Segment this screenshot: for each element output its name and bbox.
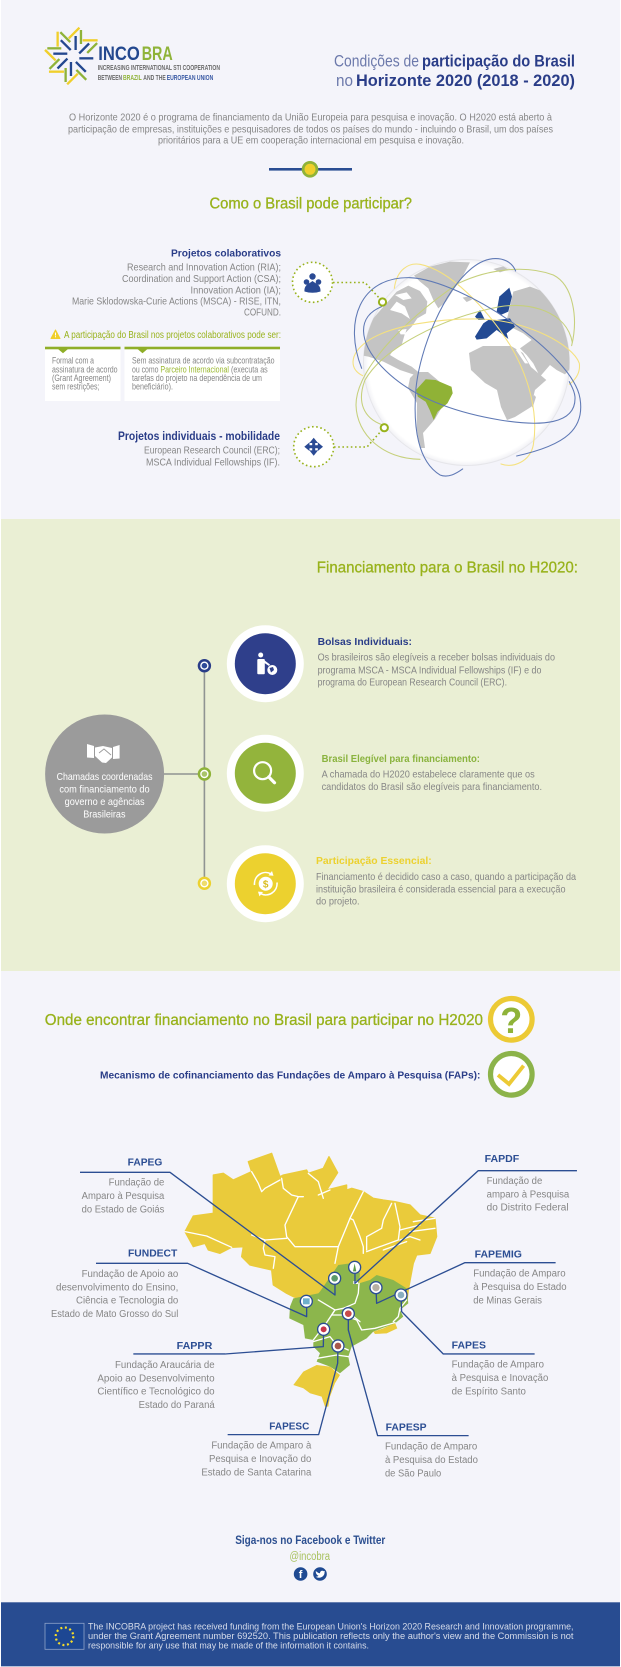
orbits — [353, 259, 581, 476]
panel: formal — [45, 347, 120, 401]
label: FAPEG: Fundação de — [109, 1178, 165, 1189]
text block: Bolsas Individuais: Os brasileiros são elegíveis a receber bolsas individuais do — [318, 652, 555, 664]
funding disclaimer: under the Grant Agreement number 692520. This publication reflects only the author's view and the Commission is not — [88, 1631, 574, 1642]
logo wordmark: INCREASING INTERNATIONAL STI COOPERATION — [98, 63, 220, 72]
intro paragraph — [68, 112, 553, 147]
funding disclaimer: The INCOBRA project has received funding from the European Union's Horizon 2020 Research and Innovation programme, — [88, 1621, 574, 1632]
label: FAPPR: Apoio ao Desenvolvimento — [97, 1373, 215, 1384]
title: no — [336, 72, 353, 90]
text block: Participação Essencial: Participação Essencial: — [316, 855, 432, 867]
globe with orbits — [353, 259, 581, 476]
label: FAPEG: Amparo à Pesquisa — [82, 1191, 165, 1202]
logo wordmark: EUROPEAN UNION — [167, 73, 213, 82]
icon: warning triangle — [51, 330, 60, 338]
icon circle: money exchange — [227, 845, 304, 922]
label: FAPEMIG — [473, 1250, 567, 1306]
title: Horizonte 2020 (2018 - 2020) — [356, 72, 575, 90]
subheading: mecanismo FAPs: Mecanismo de cofinanciamento das Fundações de Amparo à Pesquisa (FAPs): — [100, 1069, 480, 1081]
icon circle: magnifier — [227, 735, 304, 812]
connector lines — [164, 666, 204, 883]
text block: Brasil Elegível: Brasil Elegível para financiamento: — [322, 753, 480, 765]
text block: Brasil Elegível: candidatos do Brasil são elegíveis para financiamento. — [322, 781, 542, 793]
gray circle: chamadas coordenadas: Brasileiras — [83, 808, 126, 820]
logo wordmark — [98, 43, 220, 82]
divider ornament — [269, 161, 352, 178]
label: FAPEMIG: Fundação de Amparo — [473, 1269, 566, 1280]
panel: subcontratação: ou como — [132, 364, 158, 374]
text block: Participação Essencial: do projeto. — [316, 896, 360, 908]
heading: Onde encontrar financiamento: Onde encontrar financiamento no Brasil para participar no H2020 — [45, 1012, 483, 1029]
logo wordmark: BRA — [142, 43, 173, 65]
text block: Bolsas Individuais: programa do European Research Council (ERC). — [318, 677, 507, 689]
label: FAPEMIG: FAPEMIG — [475, 1250, 522, 1261]
footer panel — [1, 1602, 620, 1666]
intro paragraph: prioritários para a UE em cooperação internacional em pesquisa e inovação. — [158, 135, 464, 147]
label: FUNDECT — [51, 1248, 179, 1320]
icon: question mark: ? — [500, 1000, 522, 1041]
gray circle: chamadas coordenadas — [45, 714, 164, 834]
label: FAPESC: Estado de Santa Catarina — [201, 1467, 312, 1478]
logo wordmark: AND THE — [143, 73, 166, 82]
label: FAPES — [452, 1340, 549, 1397]
social block: Siga-nos no Facebook e Twitter — [235, 1535, 386, 1547]
label: FAPPR: Estado do Paraná — [139, 1400, 215, 1411]
icon: question mark — [490, 998, 532, 1041]
text block: Participação Essencial: Financiamento é decidido caso a caso, quando a participação da — [316, 871, 576, 883]
intro paragraph: participação de empresas, instituições e pesquisadores de todos os países do mundo - incluindo o Brasil, um dos países — [68, 123, 553, 135]
funding disclaimer — [88, 1621, 574, 1652]
pins — [300, 1261, 407, 1352]
callout: participação do Brasil: A participação do Brasil nos projetos colaborativos pode ser: — [64, 330, 281, 341]
map: state borders — [185, 1172, 435, 1358]
label: FUNDECT: FUNDECT — [128, 1248, 177, 1259]
icon circle: person with globe — [227, 625, 304, 702]
text block: Projetos colaborativos: Projetos colaborativos — [171, 248, 281, 260]
social block: @incobra — [290, 1551, 330, 1563]
icon: collaborative people — [292, 262, 386, 306]
icon: check mark — [490, 1054, 532, 1095]
icon: mobility arrows — [294, 424, 388, 467]
Brazil — [416, 379, 453, 420]
gray circle: chamadas coordenadas: com financiamento do — [59, 784, 150, 796]
intro paragraph: O Horizonte 2020 é o programa de financiamento da União Europeia para pesquisa e inovação. O H2020 está aberto à — [69, 112, 552, 124]
gray circle: chamadas coordenadas: governo e agências — [65, 796, 145, 808]
map: green states — [289, 1263, 408, 1373]
label: FAPPR: Fundação Araucária de — [115, 1360, 215, 1371]
text block: Projetos colaborativos: COFUND. — [244, 307, 281, 319]
icon: star pinwheel — [45, 28, 98, 84]
panel: subcontratação: Sem assinatura de acordo via subcontratação — [132, 355, 274, 365]
timeline node: green — [198, 767, 211, 781]
text block: Participação Essencial — [316, 855, 576, 908]
logo: INCOBRA — [45, 28, 220, 84]
text block: Projetos individuais — [118, 431, 280, 469]
label: FAPESP: Fundação de Amparo — [385, 1442, 478, 1453]
panel: formal: assinatura de acordo — [52, 364, 118, 374]
label: FAPPR — [97, 1341, 215, 1411]
text block: Projetos colaborativos — [72, 248, 281, 319]
text block: Participação Essencial: instituição brasileira é considerada essencial para a execução — [316, 883, 566, 895]
title: Condições de — [334, 53, 419, 71]
label: FAPDF — [485, 1154, 570, 1214]
label: FUNDECT: Estado de Mato Grosso do Sul — [51, 1309, 178, 1320]
panel: subcontratação: tarefas do projeto na dependência de um — [132, 373, 262, 383]
label: FAPESP: FAPESP — [386, 1422, 427, 1433]
text block: Bolsas Individuais: Bolsas Individuais: — [318, 636, 412, 648]
label: FAPDF: Fundação de — [487, 1176, 543, 1187]
label: FAPESP: à Pesquisa do Estado — [385, 1455, 478, 1466]
title — [334, 53, 575, 90]
logo wordmark: BETWEEN — [98, 73, 122, 82]
panel: formal: Formal com a — [52, 355, 94, 365]
label: FAPEG: do Estado de Goiás — [82, 1204, 164, 1215]
label: FAPESC — [201, 1422, 312, 1478]
label: FAPESC: FAPESC — [269, 1422, 309, 1433]
label: FAPES: à Pesquisa e Inovação — [452, 1373, 549, 1384]
label: FAPDF: amparo à Pesquisa — [487, 1189, 570, 1200]
leader lines — [80, 1171, 577, 1436]
text block: Bolsas Individuais — [318, 636, 555, 689]
label: FAPPR: FAPPR — [177, 1341, 212, 1352]
label: FAPEMIG: à Pesquisa do Estado — [473, 1282, 567, 1293]
label: FUNDECT: Fundação de Apoio ao — [82, 1269, 179, 1280]
timeline node: navy — [198, 659, 211, 672]
text block: Projetos colaborativos: Coordination and Support Action (CSA); — [122, 273, 281, 285]
label: FAPES: Fundação de Amparo — [452, 1360, 544, 1371]
gray circle: chamadas coordenadas: Chamadas coordenadas — [57, 771, 152, 783]
label: FUNDECT: desenvolvimento do Ensino, — [56, 1282, 178, 1293]
social block — [235, 1535, 386, 1581]
label: FAPESP — [385, 1422, 478, 1479]
text block: Projetos individuais: MSCA Individual Fellowships (IF). — [146, 457, 280, 469]
map: yellow states — [185, 1153, 437, 1317]
label: FAPEG — [82, 1157, 165, 1215]
text block: Bolsas Individuais: programa MSCA - MSCA Individual Fellowships (IF) e do — [318, 664, 542, 676]
label: FAPPR: Científico e Tecnológico do — [97, 1387, 215, 1398]
text block: Projetos individuais: European Research Council (ERC); — [144, 444, 280, 456]
icon: handshake — [87, 744, 120, 763]
logo wordmark: INCO — [98, 43, 140, 65]
panel: financiamento — [1, 519, 620, 971]
heading: Financiamento: Financiamento para o Brasil no H2020: — [317, 560, 578, 577]
text block: Brasil Elegível: A chamada do H2020 estabelece claramente que os — [322, 769, 535, 781]
logo wordmark: BRAZIL — [123, 73, 142, 82]
land masses — [360, 262, 571, 420]
map: Rio Grande do Sul — [293, 1365, 340, 1407]
label: FAPESC: Fundação de Amparo à — [211, 1441, 312, 1452]
funding disclaimer: responsible for any use that may be made of the information it contains. — [88, 1641, 369, 1652]
text block: Projetos colaborativos: Research and Innovation Action (RIA); — [127, 262, 281, 274]
label: FAPDF: do Distrito Federal — [487, 1203, 569, 1214]
map of Brazil with FAP labels — [51, 1153, 577, 1479]
text block: Brasil Elegível — [322, 753, 542, 793]
text block: Projetos colaborativos: Marie Sklodowska-Curie Actions (MSCA) - RISE, ITN, — [72, 295, 281, 307]
label: FAPDF: FAPDF — [485, 1154, 519, 1165]
heading: Como o Brasil pode participar: Como o Brasil pode participar? — [210, 195, 412, 212]
panel: subcontratação: beneficiário). — [132, 382, 173, 392]
label: FUNDECT: Ciência e Tecnologia do — [76, 1296, 179, 1307]
EU countries — [475, 288, 515, 340]
icon circle: money exchange: $ — [263, 879, 269, 890]
text block: Projetos individuais: Projetos individuais - mobilidade — [118, 431, 280, 443]
title: participação do Brasil — [422, 53, 575, 71]
timeline node: yellow — [198, 877, 211, 890]
callout: participação do Brasil — [45, 330, 281, 401]
label: FAPESP: de São Paulo — [385, 1468, 442, 1479]
map: Rio de Janeiro — [373, 1323, 397, 1334]
South America — [408, 372, 452, 448]
panel: subcontratação — [124, 347, 280, 401]
label: FAPES: FAPES — [452, 1340, 486, 1351]
icon: EU flag — [45, 1623, 84, 1649]
label: FAPEMIG: de Minas Gerais — [473, 1295, 542, 1306]
icon: facebook — [294, 1567, 307, 1581]
label: FAPES: de Espírito Santo — [452, 1386, 526, 1397]
text block: Projetos colaborativos: Innovation Action (IA); — [190, 284, 281, 296]
icon: facebook: f — [299, 1569, 303, 1581]
label: FAPEG: FAPEG — [128, 1157, 163, 1168]
panel: subcontratação: (executa as — [231, 364, 268, 374]
panel: formal: (Grant Agreement) — [52, 373, 111, 383]
label: FAPESC: Pesquisa e Inovação do — [209, 1454, 312, 1465]
icon: twitter — [313, 1567, 327, 1581]
panel: formal: sem restrições; — [52, 382, 99, 392]
panel: subcontratação: Parceiro Internacional — [160, 364, 229, 374]
